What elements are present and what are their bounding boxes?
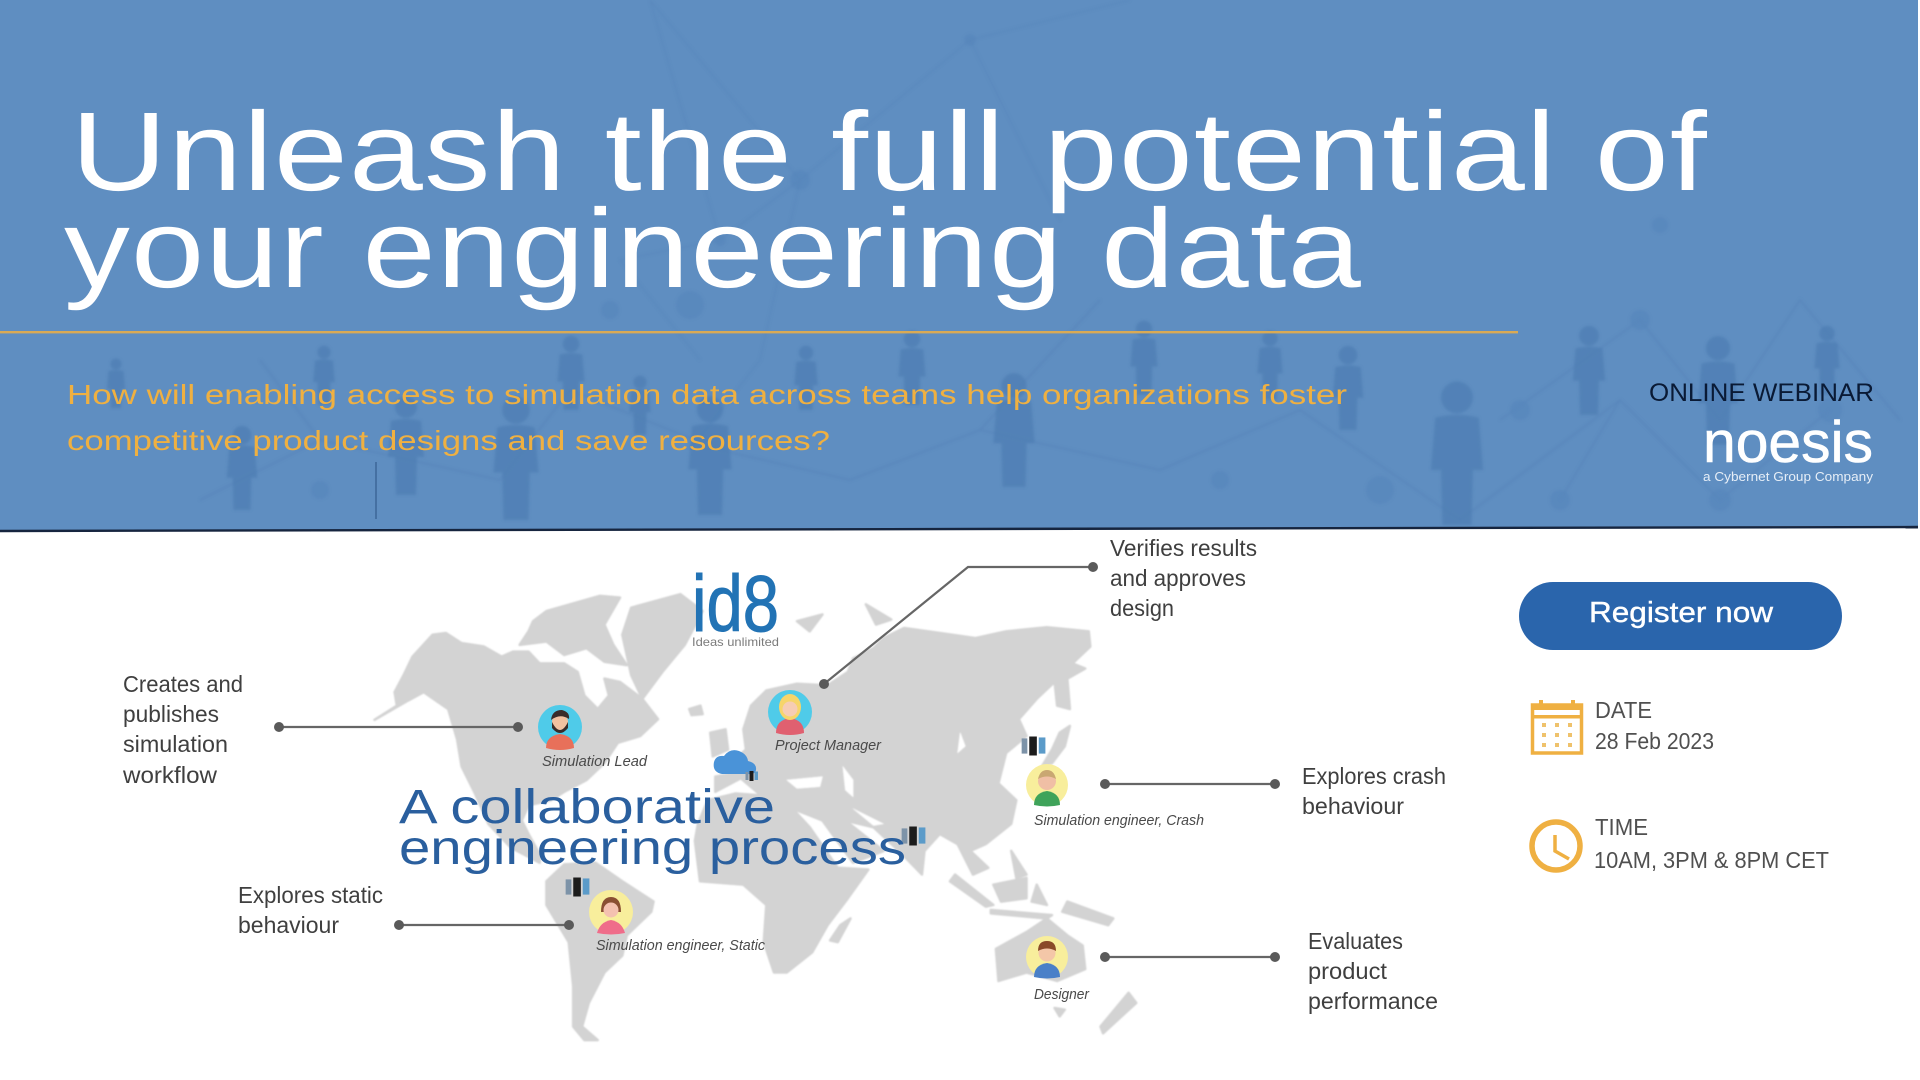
date block: 28 Feb 2023 bbox=[1595, 728, 1714, 754]
label: creates and publishes bbox=[122, 671, 243, 788]
label: explores static bbox=[238, 882, 383, 938]
avatar: designer bbox=[1026, 936, 1068, 978]
noesis logo: a Cybernet Group Company bbox=[1703, 469, 1874, 484]
section heading: engineering process bbox=[399, 822, 906, 875]
role captions: Simulation Lead bbox=[542, 753, 648, 770]
subtitle: competitive product designs and save resources? bbox=[67, 425, 830, 456]
subtitle: How will enabling access to simulation data across teams help organizations foster bbox=[67, 379, 1347, 410]
avatar: simulation engineer crash bbox=[1026, 764, 1068, 806]
role captions: Simulation engineer, Static bbox=[596, 937, 765, 954]
time block bbox=[1594, 814, 1829, 873]
role captions bbox=[542, 737, 1204, 1003]
id8 logo: Ideas unlimited bbox=[692, 635, 779, 649]
subtitle bbox=[67, 379, 1347, 456]
connector lines bbox=[274, 562, 1280, 962]
online webinar label: ONLINE WEBINAR bbox=[1649, 379, 1874, 407]
label: creates and publishes: workflow bbox=[122, 762, 218, 788]
label: evaluates product bbox=[1308, 928, 1438, 1014]
role captions: Simulation engineer, Crash bbox=[1034, 812, 1204, 829]
date block: DATE bbox=[1595, 697, 1652, 723]
title: Unleash the full potential of bbox=[71, 89, 1708, 214]
role captions: Designer bbox=[1034, 986, 1090, 1003]
title: your engineering data bbox=[64, 186, 1362, 311]
register button: Register now bbox=[1589, 597, 1774, 629]
label: explores crash: behaviour bbox=[1302, 793, 1404, 819]
icon: calendar bbox=[1532, 700, 1582, 753]
label: verifies results: and approves bbox=[1110, 565, 1246, 591]
header banner bbox=[0, 0, 1918, 531]
time block: TIME bbox=[1595, 814, 1648, 840]
avatar: project manager bbox=[768, 690, 812, 735]
orange divider rule bbox=[0, 331, 1518, 333]
avatar: simulation engineer static bbox=[589, 890, 633, 934]
label: creates and publishes: publishes bbox=[123, 701, 219, 727]
section heading: A collaborative bbox=[399, 781, 775, 834]
label: verifies results: design bbox=[1110, 595, 1174, 621]
background network and people pattern bbox=[108, 177, 1839, 525]
cloud icon bbox=[714, 750, 756, 774]
world map bbox=[375, 594, 1136, 1040]
id8 logo: id8 bbox=[692, 559, 779, 648]
label: evaluates product: performance bbox=[1308, 988, 1438, 1014]
label: verifies results: Verifies results bbox=[1110, 535, 1257, 561]
icon: clock bbox=[1532, 822, 1580, 870]
section heading bbox=[399, 781, 906, 875]
noesis logo: noesis bbox=[1703, 410, 1873, 475]
title bbox=[64, 89, 1708, 311]
server icons bbox=[566, 736, 1045, 896]
label: explores crash bbox=[1302, 763, 1446, 819]
label: evaluates product: Evaluates bbox=[1308, 928, 1403, 954]
register button bbox=[1519, 582, 1842, 650]
time block: 10AM, 3PM & 8PM CET bbox=[1594, 847, 1829, 873]
label: explores static: Explores static bbox=[238, 882, 383, 908]
label: verifies results bbox=[1110, 535, 1257, 621]
label: explores crash: Explores crash bbox=[1302, 763, 1446, 789]
label: creates and publishes: Creates and bbox=[123, 671, 243, 697]
avatar: simulation lead bbox=[538, 705, 582, 750]
label: creates and publishes: simulation bbox=[123, 731, 228, 757]
date block bbox=[1595, 697, 1714, 754]
label: explores static: behaviour bbox=[238, 912, 339, 938]
label: evaluates product: product bbox=[1308, 958, 1387, 984]
role captions: Project Manager bbox=[775, 737, 882, 754]
